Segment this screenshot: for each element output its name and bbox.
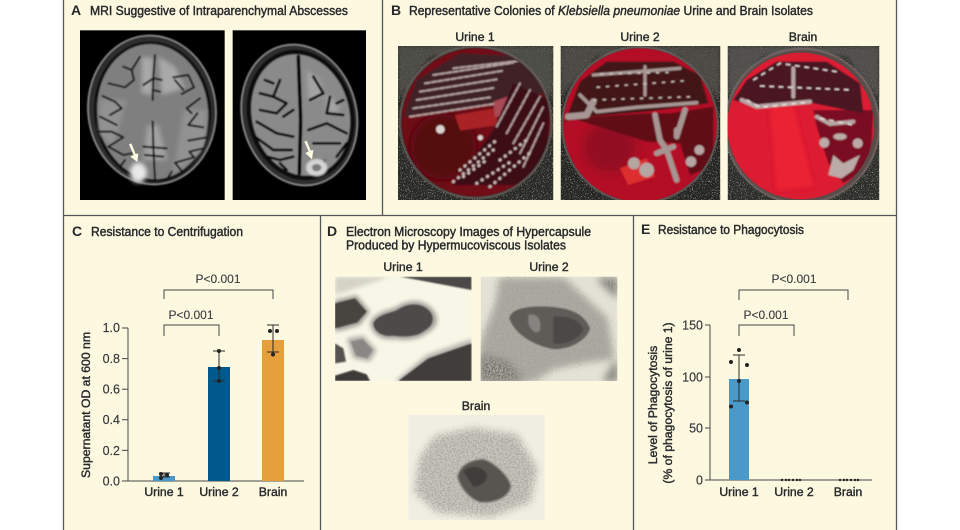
micrograph brain — [408, 415, 545, 520]
micrograph urine 1 — [335, 277, 472, 381]
bar urine 1 — [729, 379, 749, 480]
bar chart — [646, 272, 872, 499]
y tick labels: 1.0 — [103, 321, 120, 335]
panel A letter: A — [71, 2, 81, 18]
panel D heading — [346, 225, 591, 252]
x labels: Brain — [834, 485, 862, 499]
significance brackets: P<0.001 — [743, 308, 789, 322]
panel C heading: Resistance to Centrifugation — [91, 225, 243, 239]
y tick labels: 0.0 — [103, 474, 120, 488]
y tick labels: 150 — [682, 318, 703, 332]
panel A: MRI — [71, 2, 372, 200]
error bars and dots — [159, 325, 279, 480]
error bar and dots — [729, 348, 749, 408]
x labels: Urine 1 — [719, 485, 759, 499]
y tick labels: 0.6 — [103, 382, 120, 396]
MRI image left — [80, 29, 225, 200]
bar urine 2 — [208, 367, 230, 481]
y tick labels — [103, 321, 120, 488]
panel D letter: D — [327, 223, 337, 239]
x labels: Urine 2 — [774, 485, 814, 499]
y tick labels: 50 — [689, 422, 703, 436]
x labels: Urine 1 — [144, 485, 184, 499]
x labels: Brain — [259, 485, 287, 499]
panel E: resistance to phagocytosis — [641, 221, 872, 499]
label brain: Brain — [462, 399, 490, 413]
y axis title: Supernatant OD at 600 nm — [79, 332, 93, 478]
y tick labels: 0 — [696, 474, 703, 488]
micrographs — [335, 277, 617, 520]
y axis title: Level of Phagocytosis — [646, 346, 660, 464]
axes — [122, 328, 304, 481]
bar urine 1 — [153, 476, 175, 481]
panel A heading: MRI Suggestive of Intraparenchymal Abscesses — [90, 4, 348, 18]
significance brackets: P<0.001 — [168, 308, 214, 322]
label urine 2: Urine 2 — [620, 30, 660, 44]
y tick labels: 0.2 — [103, 444, 120, 458]
x labels — [144, 485, 287, 499]
bar chart — [79, 272, 304, 499]
significance brackets — [739, 272, 848, 336]
panel C: resistance to centrifugation — [72, 223, 304, 499]
panel C letter: C — [72, 223, 82, 239]
significance brackets — [164, 272, 273, 336]
bar brain — [262, 340, 284, 481]
arrow — [304, 141, 313, 159]
x labels — [719, 485, 862, 499]
zero dots urine 2 — [781, 479, 801, 481]
axes — [705, 325, 872, 480]
label brain: Brain — [789, 30, 817, 44]
significance brackets: P<0.001 — [771, 272, 817, 286]
panel D heading: Electron Microscopy Images of Hypercapsule — [346, 225, 591, 239]
panel B letter: B — [391, 2, 401, 18]
plate urine 2 — [560, 43, 723, 207]
MRI scans — [80, 29, 372, 200]
plate urine 1 — [397, 43, 557, 203]
x labels: Urine 2 — [199, 485, 239, 499]
panel E heading: Resistance to Phagocytosis — [658, 223, 804, 237]
y tick labels: 100 — [682, 370, 703, 384]
colony photos — [397, 43, 880, 207]
panel B heading: Representative Colonies of Klebsiella pneumoniae Urine and Brain Isolates — [409, 4, 813, 18]
plate brain — [725, 43, 880, 207]
label urine 1: Urine 1 — [383, 260, 423, 274]
y axis title — [646, 322, 675, 484]
y tick labels — [682, 318, 703, 488]
MRI image right — [226, 30, 372, 200]
panel E letter: E — [641, 221, 650, 237]
zero dots brain — [839, 479, 859, 481]
label urine 2: Urine 2 — [529, 260, 569, 274]
y axis title: (% of phagocytosis of urine 1) — [661, 322, 675, 484]
y tick labels: 0.8 — [103, 352, 120, 366]
significance brackets: P<0.001 — [195, 272, 241, 286]
panel D heading: Produced by Hypermucoviscous Isolates — [346, 238, 566, 252]
panel D: electron microscopy — [327, 223, 617, 520]
micrograph urine 2 — [481, 277, 617, 381]
y tick labels: 0.4 — [103, 413, 120, 427]
arrow — [129, 143, 138, 162]
label urine 1: Urine 1 — [455, 30, 495, 44]
panel B: colonies — [391, 2, 880, 207]
